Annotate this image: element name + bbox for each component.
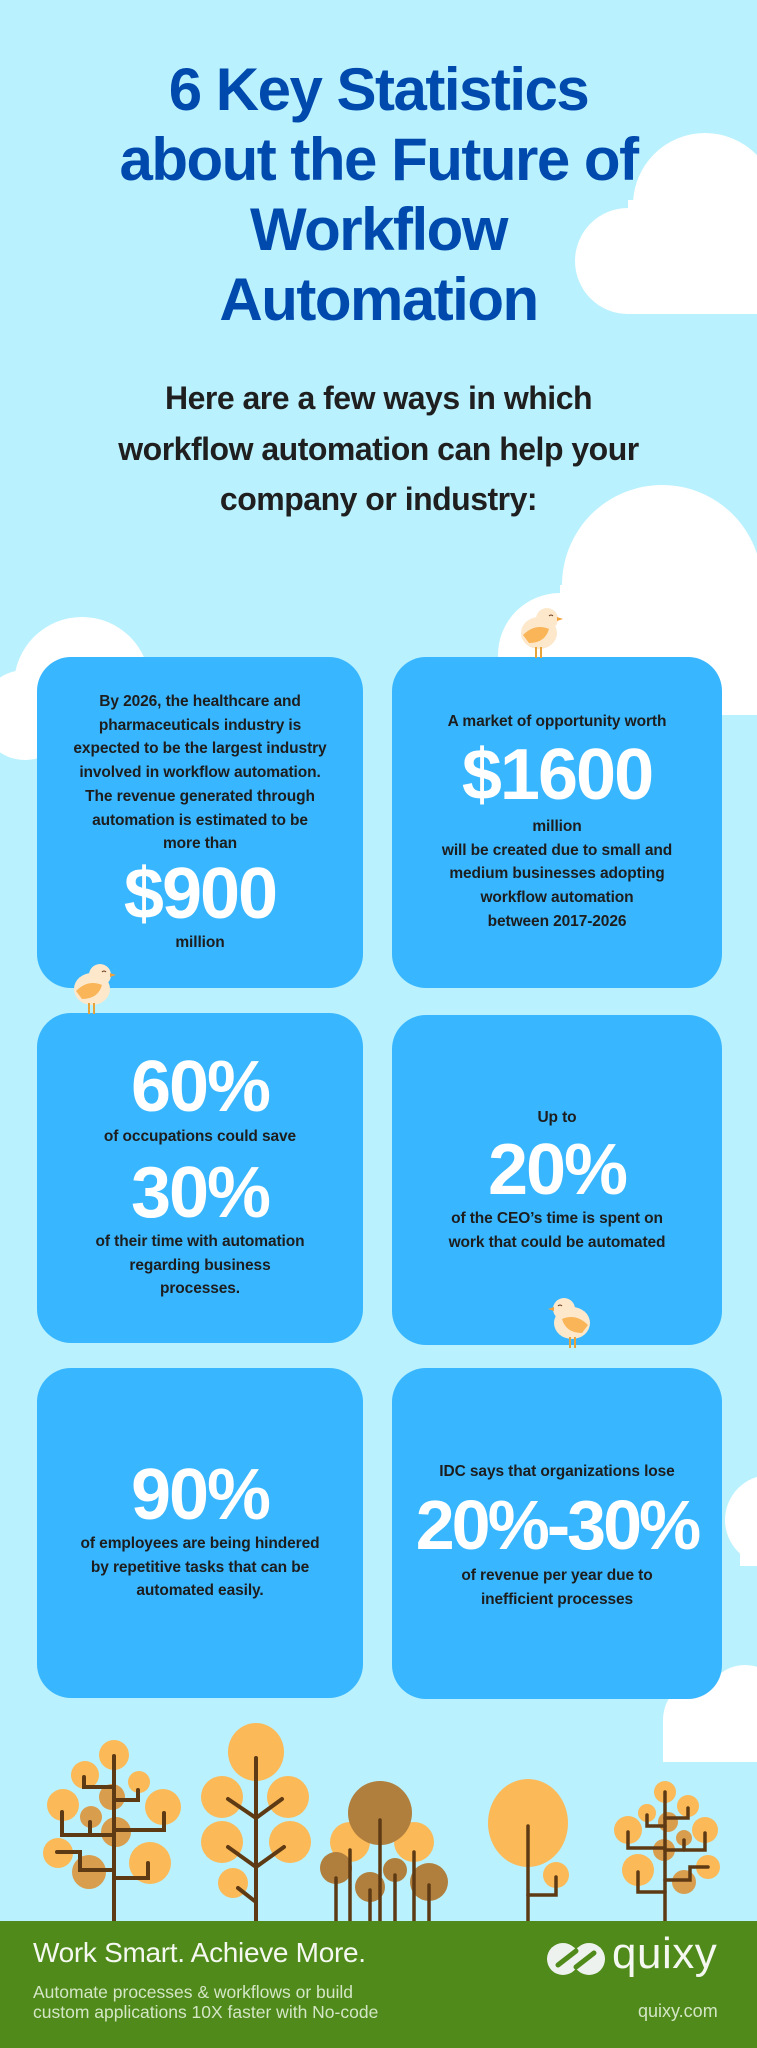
big number 60%: 60%: [131, 1047, 269, 1127]
text: [96, 1233, 304, 1297]
big number: $1600: [462, 735, 652, 815]
trees illustration: [43, 1723, 720, 1921]
footer description: Automate processes & workflows or build: [33, 1982, 353, 2002]
icon: bird on right card: [521, 608, 563, 658]
icon: bird on left card bottom: [74, 964, 116, 1014]
panel: $1600 market: [392, 657, 722, 988]
logo: quixy: [547, 1929, 717, 1978]
title: 6 Key Statistics: [169, 56, 588, 123]
subtitle: workflow automation can help your: [118, 430, 639, 466]
card text: expected to be the largest industry: [73, 740, 327, 757]
card text: By 2026, the healthcare and: [99, 693, 301, 710]
logo text: quixy: [612, 1929, 717, 1978]
text: [81, 1535, 319, 1599]
big number: 20%: [488, 1130, 626, 1210]
logo icon: [547, 1943, 605, 1975]
card text: automation is estimated to be: [92, 812, 308, 829]
subtitle: [118, 380, 639, 517]
card intro: A market of opportunity worth: [448, 713, 666, 730]
panel: CEO 20%: [392, 1015, 722, 1345]
panel: 60% / 30%: [37, 1013, 363, 1343]
big number: $900: [124, 854, 276, 934]
text: processes.: [160, 1280, 240, 1297]
title: about the Future of: [119, 126, 638, 193]
text: of the CEO’s time is spent on: [451, 1210, 663, 1227]
text: by repetitive tasks that can be: [91, 1559, 309, 1576]
big number 30%: 30%: [131, 1153, 269, 1233]
text: [448, 1210, 665, 1251]
text: inefficient processes: [481, 1591, 633, 1608]
title: [119, 56, 640, 333]
card text: medium businesses adopting: [449, 865, 665, 882]
card text: between 2017-2026: [488, 913, 626, 930]
card text: involved in workflow automation.: [79, 764, 321, 781]
text: regarding business: [129, 1257, 271, 1274]
unit: million: [175, 934, 225, 951]
intro: Up to: [537, 1109, 577, 1126]
tagline: Work Smart. Achieve More.: [33, 1937, 366, 1968]
card text: workflow automation: [480, 889, 634, 906]
text: of their time with automation: [96, 1233, 304, 1250]
intro: IDC says that organizations lose: [439, 1463, 675, 1480]
text: of employees are being hindered: [81, 1535, 319, 1552]
card text: [73, 693, 327, 852]
text: of revenue per year due to: [461, 1567, 653, 1584]
card text: The revenue generated through: [85, 788, 315, 805]
footer description: custom applications 10X faster with No-code: [33, 2002, 378, 2022]
text: work that could be automated: [449, 1234, 665, 1251]
big number: 20%-30%: [416, 1486, 698, 1564]
title: Workflow: [250, 196, 507, 263]
card text: will be created due to small and: [442, 842, 672, 859]
panel: 90%: [37, 1368, 363, 1698]
card text: more than: [163, 835, 237, 852]
title: Automation: [219, 266, 538, 333]
subtitle: Here are a few ways in which: [165, 380, 592, 416]
card text: [442, 818, 672, 930]
card text: pharmaceuticals industry is: [99, 717, 301, 734]
subtitle: company or industry:: [220, 481, 537, 517]
card text: million: [532, 818, 582, 835]
footer band: [0, 1921, 757, 2048]
text: automated easily.: [136, 1582, 264, 1599]
panel: healthcare $900: [37, 657, 363, 988]
big number: 90%: [131, 1455, 269, 1535]
footer description: [33, 1982, 378, 2022]
text: of occupations could save: [104, 1128, 296, 1145]
icon: bird on CEO card: [548, 1298, 590, 1348]
website: quixy.com: [638, 2001, 718, 2021]
text: [461, 1567, 653, 1608]
panel: IDC 20%-30%: [392, 1368, 722, 1699]
